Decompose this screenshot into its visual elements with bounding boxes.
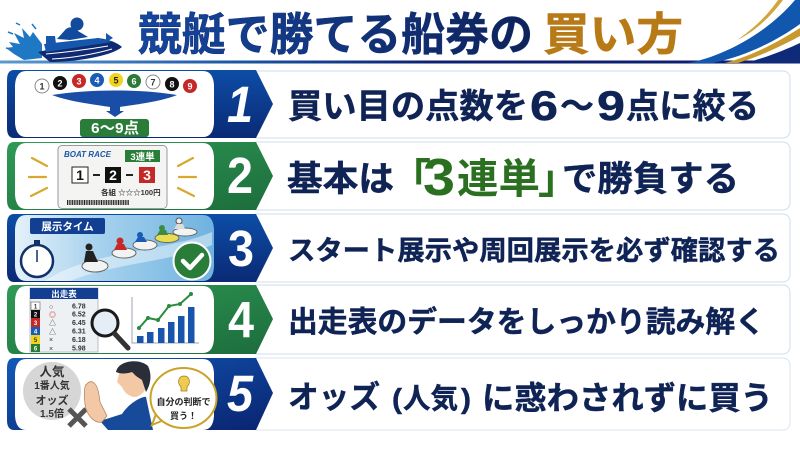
row 5 text: オッズ <box>288 380 380 415</box>
row 2 ticket: 1 <box>76 167 84 183</box>
row 4 race table: ◎ <box>49 311 56 319</box>
row 1 number: 1 <box>227 76 253 133</box>
icon: magnifying glass <box>92 310 128 348</box>
speech bubble: 自分の判断で <box>156 396 211 407</box>
row 2 ticket: 各組 ☆☆☆100円 <box>101 187 161 197</box>
row 4 race table: 1 <box>34 304 38 310</box>
panel: row 5 <box>7 358 790 430</box>
row 1 numbered balls: 9 <box>187 82 193 92</box>
row 4 race table: 出走表 <box>51 289 77 299</box>
row 4 number chevron <box>7 285 273 354</box>
row 4 race table: 5.98 <box>72 346 86 352</box>
icon: stopwatch <box>21 240 53 277</box>
row 4 race table: 6.31 <box>72 328 86 336</box>
row 1 numbered balls: 2 <box>57 78 63 88</box>
row 4 race table: × <box>49 337 53 344</box>
row 2 text: で勝負する <box>562 160 739 199</box>
row 4 race table: 6.45 <box>72 320 86 327</box>
row 2 text: 「 <box>390 156 431 202</box>
panel: row 3 <box>7 214 790 282</box>
panel: row 2 <box>7 142 790 210</box>
row 1 funnel arrow <box>52 90 177 117</box>
row 5 text: 人気 <box>403 383 458 414</box>
row 5 odds circle: オッズ <box>36 393 68 407</box>
icon: boat racer <box>6 18 122 62</box>
row 3 text card <box>250 214 790 282</box>
row 5 text <box>288 380 773 416</box>
row 1 numbered balls <box>35 73 197 93</box>
row 2 number chevron <box>7 142 273 210</box>
row 1 text: 9 <box>597 82 625 129</box>
row 1 text: 買い目の点数を <box>288 88 528 126</box>
row 5 odds circle: 1.5倍 <box>40 407 64 420</box>
row 5 text: ( <box>392 383 403 414</box>
row 1 green badge <box>80 119 149 137</box>
row 1 number chevron <box>7 70 273 138</box>
row 2 ticket: 3 <box>143 167 151 183</box>
row 2 ticket: 2 <box>109 167 117 183</box>
row 5 illustration panel <box>15 359 214 430</box>
row 4 race table <box>30 288 98 353</box>
panel: row 1 <box>7 70 790 138</box>
row 2 ticket <box>58 146 167 208</box>
row 3 text: スタート展示や周回展示を必ず確認する <box>288 236 780 266</box>
row 1 numbered balls: 6 <box>131 76 137 86</box>
row 4 race table: 3 <box>34 321 38 327</box>
row 5 number: 5 <box>227 365 254 422</box>
row 1 text: 6 <box>530 82 558 129</box>
row 4 text card <box>250 285 790 354</box>
row 4 race table: 4 <box>34 330 38 336</box>
row 4 illustration panel <box>15 286 214 353</box>
row 2 ticket: BOAT RACE <box>64 150 112 159</box>
speech bubble <box>150 368 216 428</box>
title: 買い方 <box>543 9 683 60</box>
row 2 text: 3 <box>423 149 455 207</box>
row 2 gold rays <box>29 158 196 196</box>
row 5 odds circle: 1番人気 <box>34 379 70 392</box>
row 4 race table: 6 <box>34 346 38 352</box>
row 4 race table: △ <box>49 327 56 336</box>
row 5 text card <box>250 358 790 430</box>
row 5 number chevron <box>7 358 273 430</box>
row 5 text: に惑わされずに買う <box>482 380 773 416</box>
row 2 text: 」 <box>538 156 579 202</box>
row 2 text <box>287 149 739 207</box>
row 1 numbered balls: 8 <box>169 80 175 90</box>
row 4 race table: ○ <box>49 304 53 311</box>
row 4 race table: 6.52 <box>72 312 86 318</box>
icon: corner swoosh <box>688 0 800 63</box>
row 5 man with raised hands <box>84 361 153 430</box>
row 3 label <box>30 218 105 234</box>
icon: cross mark <box>69 409 86 426</box>
row 1 numbered balls: 7 <box>150 78 156 88</box>
header rule <box>0 60 800 64</box>
row 3 label: 展示タイム <box>41 221 94 233</box>
row 1 numbered balls: 4 <box>94 76 100 86</box>
row 1 text card <box>250 71 790 138</box>
title: 競艇で勝てる船券の <box>138 9 533 60</box>
row 3 number: 3 <box>228 220 254 277</box>
row 4 number: 4 <box>228 291 255 348</box>
row 4 bar and line chart <box>132 292 199 343</box>
row 5 text: ) <box>461 383 471 414</box>
row 4 race table: 6.78 <box>72 304 86 310</box>
row 4 race table: 5 <box>34 338 38 344</box>
row 1 green badge: 6〜9点 <box>91 119 139 137</box>
row 5 odds circle: 人気 <box>39 364 65 379</box>
row 2 number: 2 <box>227 147 253 204</box>
row 1 numbered balls: 3 <box>76 76 82 86</box>
row 1 numbered balls: 5 <box>113 76 119 86</box>
row 3 water illustration <box>15 215 214 281</box>
row 4 race table: 2 <box>34 312 38 318</box>
panel: row 4 <box>7 285 790 354</box>
row 2 ticket: 3連単 <box>130 151 155 163</box>
icon: green check <box>174 242 210 280</box>
row 4 race table: △ <box>49 318 56 327</box>
row 1 text: 点に絞る <box>626 88 759 126</box>
row 2 text card <box>250 142 790 210</box>
row 1 numbered balls: 1 <box>39 82 45 92</box>
row 4 race table: × <box>49 346 53 353</box>
row 1 illustration panel <box>15 71 214 137</box>
row 1 text <box>288 82 759 129</box>
row 3 boats <box>82 218 197 272</box>
speech bubble: 買う！ <box>170 411 197 421</box>
row 2 text: 基本は <box>287 160 394 199</box>
row 2 text: 連単 <box>457 156 540 202</box>
row 5 odds circle <box>23 362 81 420</box>
row 4 race table: 6.18 <box>72 337 86 344</box>
row 4 text: 出走表のデータをしっかり読み解く <box>288 305 765 339</box>
row 1 text: 〜 <box>560 88 594 126</box>
row 3 number chevron <box>7 214 273 282</box>
row 2 illustration panel <box>15 143 214 209</box>
